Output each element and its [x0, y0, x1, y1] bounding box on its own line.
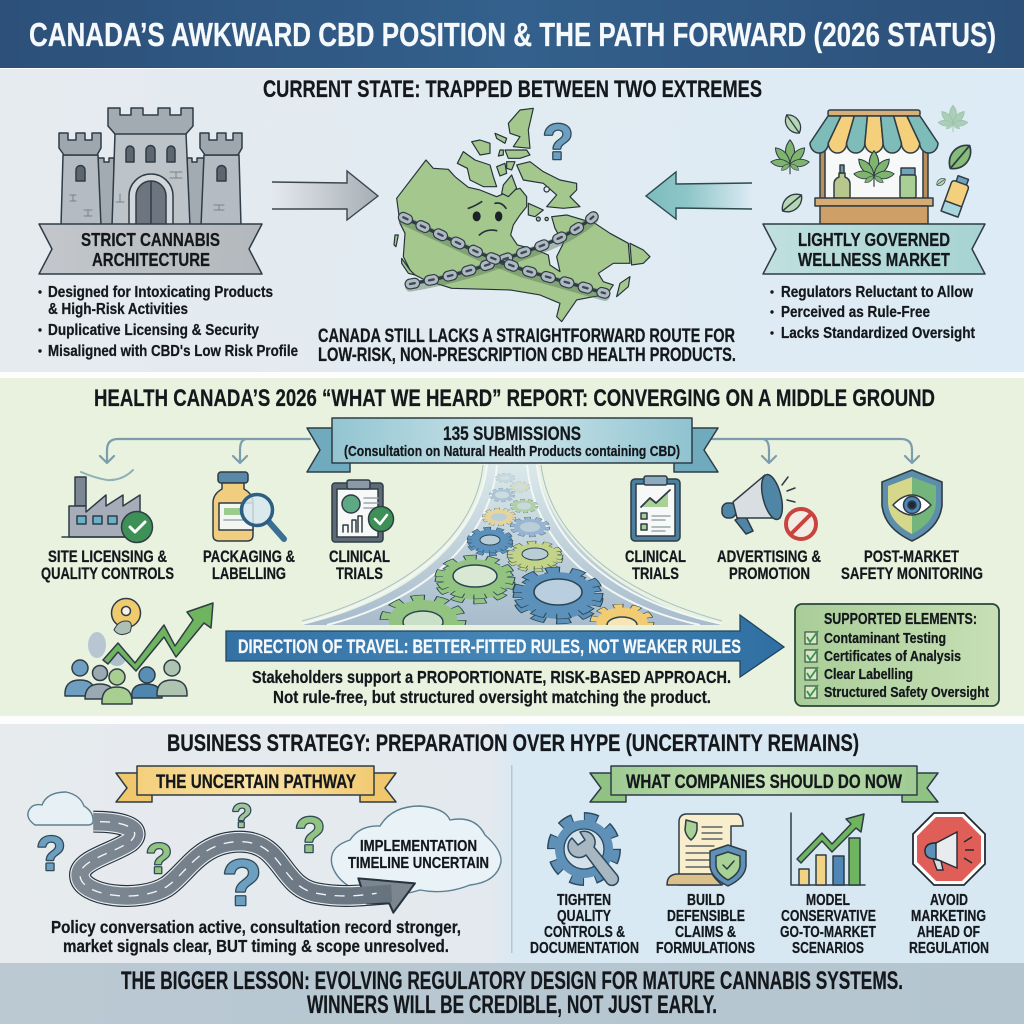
labels: what to do [530, 892, 989, 957]
label: tighten quality: CONTROLS & [544, 924, 625, 941]
label: packaging [203, 548, 295, 583]
banner: what companies should do now: WHAT COMPANIES SHOULD DO NOW [626, 772, 902, 793]
label: clinical trials left [329, 548, 390, 583]
bullet list: cannabis architecture: & High-Risk Activities [48, 301, 188, 318]
caption: no straightforward route: LOW-RISK, NON-PRESCRIPTION CBD HEALTH PRODUCTS. [318, 345, 736, 366]
arrow outline: wellness side [646, 172, 752, 219]
icon: shield with eye [882, 470, 942, 541]
footer: the bigger lesson [0, 963, 1024, 1024]
label: defensible claims: FORMULATIONS [656, 940, 755, 957]
bullet list: wellness market [770, 284, 975, 342]
label: defensible claims: CLAIMS & [675, 924, 736, 941]
panel: what we heard report [0, 378, 1024, 716]
box: supported elements: Structured Safety Oversight [824, 685, 989, 701]
banner: strict cannabis architecture: STRICT CANNABIS [81, 229, 220, 250]
label: site licensing [41, 548, 174, 583]
question marks on path [36, 797, 325, 919]
text: proportionate approach [252, 667, 731, 707]
ribbon: 135 submissions [307, 418, 718, 472]
arrow: direction of travel [226, 615, 784, 677]
label: avoid marketing: REGULATION [909, 940, 989, 957]
label: defensible claims [656, 892, 755, 957]
footer: the bigger lesson: WINNERS WILL BE CREDIBLE, NOT JUST EARLY. [307, 991, 717, 1019]
label: site licensing: QUALITY CONTROLS [41, 565, 174, 583]
label: clinical trials left: TRIALS [336, 565, 383, 583]
label: avoid marketing [909, 892, 989, 957]
label: avoid marketing: AHEAD OF [917, 924, 980, 941]
bullet list: wellness market: Lacks Standardized Oversight [781, 325, 975, 342]
bullet list: wellness market: Regulators Reluctant to Allow [781, 284, 974, 301]
icon: question mark over map: ? [543, 114, 573, 170]
bullet list: wellness market: Perceived as Rule-Free [781, 304, 930, 321]
text: policy conversation: market signals clear, BUT timing & scope unresolved. [63, 936, 449, 956]
arrow outline: strict side [272, 171, 378, 220]
label: clinical trials right [625, 548, 686, 583]
icon: clinical trials clipboard right [631, 476, 680, 541]
cloud text: implementation timeline [348, 838, 489, 872]
label: post-market: POST-MARKET [864, 548, 959, 566]
label: post-market: SAFETY MONITORING [841, 565, 983, 583]
label: conservative model: SCENARIOS [792, 940, 864, 957]
bullet list: cannabis architecture: Duplicative Licensing & Security [48, 322, 259, 339]
checkboxes [805, 631, 818, 698]
icon: bar chart with rising arrow [791, 813, 865, 885]
label: advertising [717, 548, 821, 583]
icon: megaphone with prohibition [722, 473, 816, 539]
label: clinical trials left: CLINICAL [329, 548, 390, 566]
bullet list: cannabis architecture: Misaligned with CBD's Low Risk Profile [48, 343, 298, 360]
arrow: direction of travel: DIRECTION OF TRAVEL: BETTER-FITTED RULES, NOT WEAKER RULES [238, 636, 741, 658]
label: defensible claims: BUILD [687, 892, 725, 909]
banner: the uncertain pathway [116, 766, 396, 802]
banner: strict cannabis architecture [39, 224, 262, 274]
arrow: wellness side to Canada [646, 172, 752, 219]
ribbon: 135 submissions: (Consultation on Natural Health Products containing CBD) [344, 444, 680, 460]
banner: lightly governed wellness market: WELLNESS MARKET [798, 249, 951, 270]
icon: stakeholders and rising trend [65, 598, 213, 704]
icon: cloud right [331, 806, 501, 895]
label: tighten quality: QUALITY [557, 908, 612, 925]
gears, far to near [496, 474, 514, 482]
banner: lightly governed wellness market: LIGHTLY GOVERNED [798, 229, 950, 250]
label: avoid marketing: MARKETING [911, 908, 986, 925]
icon: stop sign with megaphone [913, 813, 985, 885]
road: uncertain pathway [80, 822, 415, 913]
bullet list: cannabis architecture [38, 284, 298, 360]
icon: factory [62, 470, 152, 542]
icon: packaging bottle with magnifier [213, 472, 284, 541]
text: proportionate approach: Stakeholders support a PROPORTIONATE, RISK-BASED APPROACH. [252, 667, 731, 687]
question marks on path: ? [146, 835, 172, 883]
panel: business strategy [0, 724, 1024, 963]
label: tighten quality: DOCUMENTATION [530, 940, 639, 957]
label: post-market [841, 548, 983, 583]
text: policy conversation [51, 917, 461, 956]
question marks on path: ? [222, 846, 262, 919]
map: chained Canada [394, 108, 650, 322]
banner: lightly governed wellness market [763, 224, 985, 274]
box: supported elements [795, 604, 999, 706]
label: conservative model [780, 892, 876, 957]
icon: castle [59, 108, 242, 226]
text: proportionate approach: Not rule-free, but structured oversight matching the product. [273, 687, 711, 707]
icon: gear and wrench [554, 819, 618, 885]
branch arrows from submissions [100, 439, 919, 463]
banner: the uncertain pathway: THE UNCERTAIN PATHWAY [156, 772, 356, 793]
banner: strict cannabis architecture: ARCHITECTURE [92, 249, 210, 270]
label: packaging: LABELLING [212, 565, 286, 583]
label: conservative model: GO-TO-MARKET [780, 924, 876, 941]
label: packaging: PACKAGING & [203, 548, 295, 566]
label: conservative model: CONSERVATIVE [781, 908, 876, 925]
question marks on path: ? [36, 828, 66, 881]
label: advertising: PROMOTION [729, 565, 810, 583]
icon: wellness market stall [770, 105, 976, 224]
question marks on path: ? [232, 797, 252, 834]
label: tighten quality: TIGHTEN [557, 892, 611, 909]
banner: what companies should do now [590, 766, 938, 802]
box: supported elements: Contaminant Testing [824, 631, 946, 647]
chain: Canada locked [403, 217, 605, 296]
label: tighten quality [530, 892, 639, 957]
sad face [468, 202, 506, 235]
icon: document and shield [667, 814, 746, 886]
label: clinical trials right: TRIALS [632, 565, 679, 583]
road of converging gears [302, 463, 722, 642]
panel: current state [0, 69, 1024, 372]
title bar [0, 0, 1024, 68]
bullet list: cannabis architecture: Designed for Intoxicating Products [48, 284, 273, 301]
label: defensible claims: DEFENSIBLE [667, 908, 745, 925]
question marks on path: ? [295, 807, 325, 863]
heading: current state: CURRENT STATE: TRAPPED BETWEEN TWO EXTREMES [263, 76, 762, 103]
label: advertising: ADVERTISING & [717, 548, 821, 566]
ribbon: 135 submissions: 135 SUBMISSIONS [443, 423, 581, 445]
label: avoid marketing: AVOID [930, 892, 968, 909]
icon: cloud left [28, 792, 93, 825]
label: site licensing: SITE LICENSING & [48, 548, 167, 566]
box: supported elements: SUPPORTED ELEMENTS: [824, 611, 977, 628]
caption: no straightforward route: CANADA STILL LACKS A STRAIGHTFORWARD ROUTE FOR [318, 326, 735, 347]
caption: no straightforward route [318, 326, 736, 366]
label: conservative model: MODEL [806, 892, 850, 909]
arrow: strict side to Canada [272, 171, 378, 220]
text: policy conversation: Policy conversation active, consultation record stronger, [51, 917, 461, 937]
box: supported elements: Clear Labelling [824, 667, 913, 683]
cloud text: implementation timeline: IMPLEMENTATION [360, 838, 477, 855]
box: supported elements: Certificates of Analysis [824, 649, 961, 665]
label: clinical trials right: CLINICAL [625, 548, 686, 566]
icon: clinical trials clipboard left [332, 480, 394, 542]
cloud text: implementation timeline: TIMELINE UNCERTAIN [348, 855, 489, 872]
